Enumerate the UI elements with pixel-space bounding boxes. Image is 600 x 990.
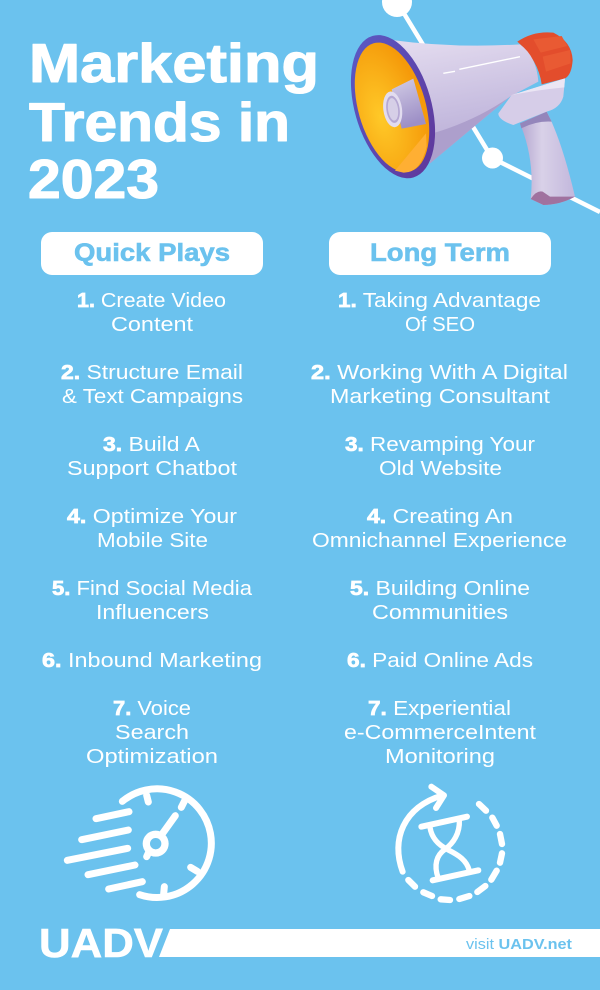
list: long term: 1. Taking Advantage [338, 290, 541, 312]
list: long term: e-CommerceIntent [344, 722, 537, 744]
heading: long term: Long Term [370, 239, 510, 267]
decorative network line [382, 0, 600, 212]
list: long term: Omnichannel Experience [312, 530, 567, 552]
list: long term: Old Website [379, 458, 502, 480]
list: long term: 2. Working With A Digital [311, 362, 568, 384]
list: long term: 7. Experiential [368, 698, 511, 720]
heading: long term [329, 232, 551, 275]
list: long term: 4. Creating An [367, 506, 513, 528]
list: quick plays: Support Chatbot [67, 458, 238, 480]
list: long term: 6. Paid Online Ads [347, 650, 533, 672]
list: quick plays: 7. Voice [113, 698, 191, 720]
list: quick plays: 3. Build A [103, 434, 201, 456]
list: quick plays: Mobile Site [97, 530, 208, 552]
list: quick plays: 4. Optimize Your [67, 506, 237, 528]
list: long term: 3. Revamping Your [345, 434, 535, 456]
panel: long term [311, 232, 568, 768]
panel: quick plays [41, 232, 263, 768]
list: long term: 5. Building Online [350, 578, 530, 600]
list: quick plays: Influencers [96, 602, 209, 624]
list: quick plays: Search [115, 722, 189, 744]
list: long term [311, 290, 568, 768]
heading: quick plays: Quick Plays [74, 239, 230, 267]
list: quick plays: 1. Create Video [77, 290, 226, 312]
logo: UADV [39, 920, 164, 966]
title: Marketing [29, 33, 319, 94]
icon: hourglass with circular arrow [398, 787, 502, 900]
list: long term: Of SEO [405, 314, 475, 336]
list: quick plays: Content [111, 314, 194, 336]
footer [39, 920, 600, 966]
list: quick plays [42, 290, 262, 768]
title [28, 33, 319, 210]
icon: megaphone [336, 25, 575, 205]
visit link: visit UADV.net [466, 937, 572, 953]
title: 2023 [28, 149, 159, 210]
footer bar [159, 929, 600, 957]
title: Trends in [29, 92, 290, 153]
list: quick plays: & Text Campaigns [62, 386, 243, 408]
heading: quick plays [41, 232, 263, 275]
list: quick plays: 6. Inbound Marketing [42, 650, 262, 672]
icon: speedometer [67, 789, 211, 898]
list: quick plays: 2. Structure Email [61, 362, 243, 384]
list: long term: Marketing Consultant [330, 386, 551, 408]
list: long term: Monitoring [385, 746, 495, 768]
list: quick plays: 5. Find Social Media [52, 578, 253, 600]
list: quick plays: Optimization [86, 746, 218, 768]
list: long term: Communities [372, 602, 508, 624]
